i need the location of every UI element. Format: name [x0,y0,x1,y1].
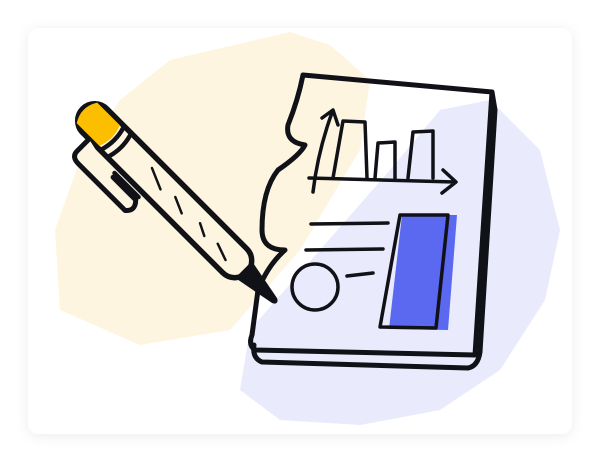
back sheet [254,92,495,368]
yellow brush background [55,32,370,345]
text lines [306,223,388,276]
chart [309,110,456,193]
card [28,28,572,434]
pen [53,97,288,331]
lavender brush background [240,100,560,425]
circle [292,264,338,310]
front sheet outline [251,75,492,355]
clip [71,139,146,213]
blue panel [380,215,457,330]
tip [238,264,283,309]
document [251,75,495,368]
